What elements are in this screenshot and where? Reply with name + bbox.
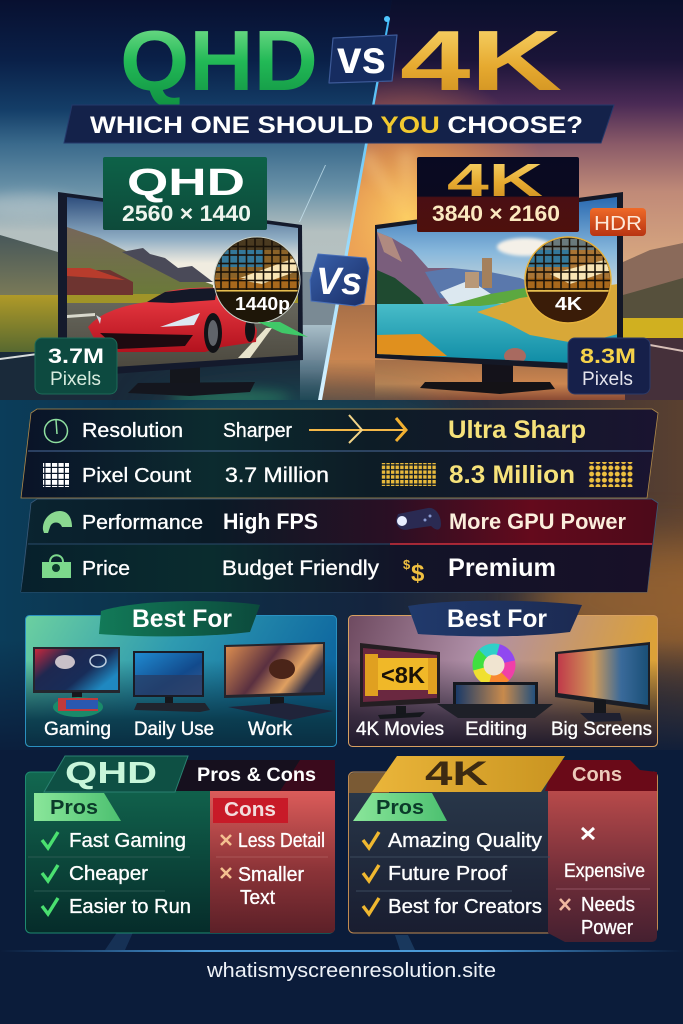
con: needs power: Needs <box>581 894 635 916</box>
footer divider <box>0 950 683 952</box>
monitor frame <box>58 192 303 378</box>
cons header: Cons <box>572 764 622 786</box>
row: price: Price <box>82 558 130 580</box>
label: work: Work <box>248 719 292 740</box>
heading tab <box>408 601 582 636</box>
monitor stand <box>128 366 255 396</box>
cons column <box>210 791 335 933</box>
monitor: QHD with car <box>58 192 308 396</box>
zoom lens: 4K: 4K <box>555 294 582 314</box>
zoom lens: 4K <box>524 237 612 324</box>
panel: 4K best for <box>348 601 658 746</box>
row: price: Premium <box>448 554 556 582</box>
monitor: 4K movies: <8K <box>381 662 425 688</box>
panel: 4K pros and cons <box>348 755 658 942</box>
lens pointer <box>258 322 308 337</box>
monitor: 4K movies <box>360 643 440 719</box>
row: pixel count: Pixel Count <box>82 465 191 487</box>
icon: clock <box>44 420 68 442</box>
row: resolution: Ultra Sharp <box>448 416 586 444</box>
label: editing: Editing <box>465 719 527 740</box>
zoom lens: 1440p <box>213 237 301 324</box>
footer url: whatismyscreenresolution.site <box>206 960 496 982</box>
heading tab <box>99 601 260 636</box>
con: expensive <box>564 828 645 882</box>
con: smaller text: Text <box>240 887 275 909</box>
QHD resolution tag: 2560 × 1440 <box>122 201 251 226</box>
icon: dollar signs: $ <box>403 557 411 572</box>
monitor: gaming <box>33 647 120 717</box>
center VS badge: Vs <box>316 261 362 303</box>
laptop: editing <box>437 682 553 718</box>
pro: fast gaming: Fast Gaming <box>69 830 186 852</box>
row: performance: Performance <box>82 512 203 534</box>
cons header <box>545 760 657 791</box>
panel: QHD best for <box>26 601 336 746</box>
pros label: Pros <box>50 797 98 819</box>
monitor: daily use <box>133 651 210 712</box>
label: daily use: Daily Use <box>134 719 214 740</box>
QHD resolution tag: QHD <box>127 162 245 204</box>
center VS badge <box>310 254 369 306</box>
pro: future proof: Future Proof <box>388 863 507 885</box>
icon: green shopping bag <box>42 555 71 578</box>
icon: gamepad <box>396 508 441 530</box>
comparison table: resolution and pixel count <box>21 409 658 498</box>
row: price <box>42 554 556 587</box>
pros label <box>353 793 447 821</box>
header strip: Pros & Cons <box>197 765 316 786</box>
monitor: 4K with landscape <box>375 192 623 394</box>
vs badge: vs <box>337 31 386 83</box>
label: 4K movies: 4K Movies <box>356 719 444 740</box>
pro: amazing quality: Amazing Quality <box>388 830 542 852</box>
pro: easier to run: Easier to Run <box>69 896 191 918</box>
con: less detail: Less Detail <box>238 830 325 852</box>
icon: pixel grid <box>43 463 69 487</box>
zoom lens: 1440p: 1440p <box>235 294 290 314</box>
con: needs power <box>560 894 635 939</box>
title <box>120 14 562 109</box>
4K resolution tag: 3840 × 2160 <box>432 201 560 226</box>
row: resolution: Sharper <box>223 420 292 442</box>
row: pixel count: 3.7 Million <box>225 464 329 487</box>
icon: color ring <box>474 645 514 685</box>
row: pixel count: 8.3 Million <box>449 461 575 489</box>
con: smaller text: Smaller <box>238 864 304 886</box>
QHD resolution tag <box>103 157 267 230</box>
screen scene <box>376 196 619 366</box>
3.7M pixels badge: 3.7M <box>48 345 104 368</box>
row: resolution: Resolution <box>82 420 183 442</box>
title word: 4K: 4K <box>400 14 562 109</box>
title word: QHD: QHD <box>120 14 318 109</box>
pro: cheaper: Cheaper <box>69 863 148 885</box>
header strip <box>170 760 335 791</box>
monitor: work <box>224 642 333 720</box>
QHD tab <box>44 755 188 792</box>
heading tab: Best For <box>447 605 547 633</box>
8.3M pixels badge <box>568 338 650 394</box>
pros label <box>34 793 121 821</box>
row: resolution <box>44 415 586 444</box>
con: smaller text <box>221 864 304 909</box>
heading tab: Best For <box>132 605 232 633</box>
pros label: Pros <box>376 797 424 819</box>
screen scene <box>60 195 305 373</box>
con: expensive: Expensive <box>564 861 645 882</box>
icon: dense dots right <box>588 462 633 487</box>
monitor stand <box>420 364 555 394</box>
subtitle banner <box>64 105 614 143</box>
4K tab: 4K <box>425 755 489 793</box>
3.7M pixels badge: Pixels <box>50 369 101 390</box>
icon: green car <box>43 511 72 533</box>
row: pixel count <box>43 461 633 489</box>
4K tab <box>372 755 565 793</box>
8.3M pixels badge: 8.3M <box>580 345 636 368</box>
label: gaming: Gaming <box>44 719 111 740</box>
icon: dense dots left <box>381 463 436 486</box>
4K resolution tag <box>417 154 579 232</box>
HDR badge: HDR <box>594 213 642 235</box>
right landscape <box>300 0 683 400</box>
cons column <box>548 791 657 942</box>
label: big screens: Big Screens <box>551 719 652 740</box>
icon: dollar signs: $ <box>411 560 425 587</box>
QHD tab: QHD <box>65 755 157 790</box>
cons label <box>213 798 288 823</box>
cons label: Cons <box>224 799 276 821</box>
left landscape <box>0 0 400 406</box>
HDR badge <box>590 208 646 236</box>
subtitle banner: WHICH ONE SHOULD YOU CHOOSE? <box>90 112 583 139</box>
arrow: sharper to ultra sharp <box>309 415 406 443</box>
row: price: Budget Friendly <box>222 557 380 580</box>
red sports car <box>88 288 257 353</box>
monitor: big screens <box>555 642 650 722</box>
pro: best for creators: Best for Creators <box>388 896 542 918</box>
3.7M pixels badge <box>35 338 117 394</box>
icon: dollar signs <box>403 557 425 587</box>
monitor frame <box>375 192 623 372</box>
row: performance: More GPU Power <box>449 509 626 534</box>
con: needs power: Power <box>581 917 633 939</box>
comparison table: performance and price <box>21 499 658 592</box>
row: performance: High FPS <box>223 509 318 534</box>
4K resolution tag: 4K <box>447 154 543 206</box>
8.3M pixels badge: Pixels <box>582 369 633 390</box>
panel: QHD pros and cons <box>26 755 335 933</box>
row: performance <box>43 508 626 534</box>
